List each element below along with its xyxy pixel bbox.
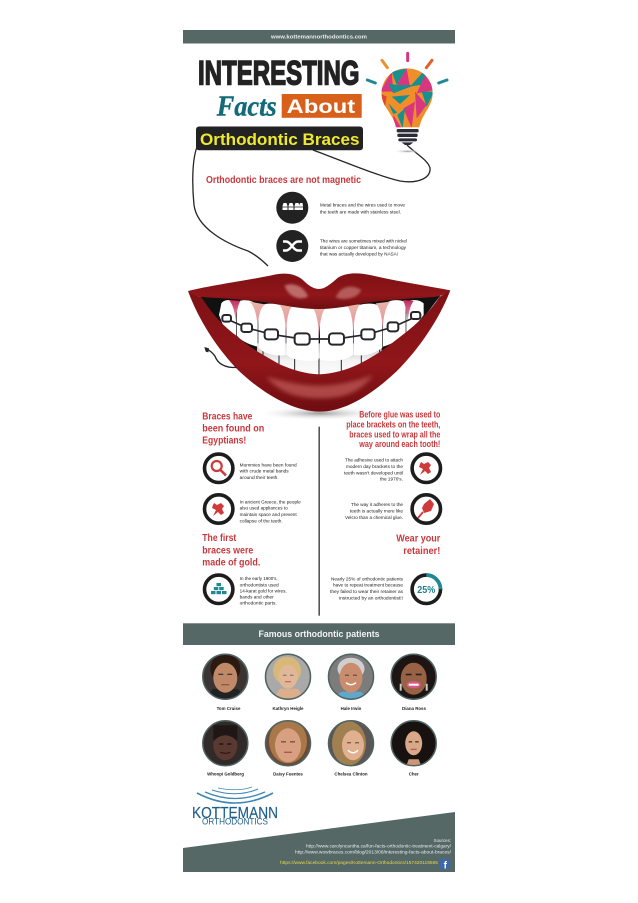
footer panel [183, 812, 455, 872]
text: retainer: have to repeat treatment because [333, 583, 404, 588]
text: gold: orthodontic parts. [240, 600, 277, 606]
text: ancient greece: also used appliances to [240, 506, 288, 511]
names row one: Hale Irwin [341, 706, 362, 711]
title: about: About [287, 96, 356, 118]
footer panel: Sources: [434, 838, 451, 843]
text: nasa: The wires are sometimes mixed with nickel [320, 239, 407, 244]
names row one [217, 706, 427, 711]
heading: before glue [346, 410, 441, 449]
icon: braces on teeth [276, 192, 308, 224]
heading: egyptians: been found on [202, 423, 264, 435]
icon: crossing wires [276, 230, 308, 262]
text: nasa [320, 239, 407, 257]
title: orthodontic braces: Orthodontic Braces [200, 130, 360, 149]
names row one: Diana Ross [402, 706, 427, 711]
heading: first braces: made of gold. [202, 557, 260, 569]
text: gold: bands and other [240, 595, 274, 600]
heading: first braces [202, 532, 260, 569]
text: adhesive: teeth wasn't developed until [344, 470, 403, 475]
text: velcro: Velcro than a chemical glue. [345, 515, 403, 520]
cable from lightbulb to braces title [313, 145, 430, 182]
text: adhesive: The adhesive used to attach [345, 458, 404, 463]
text: retainer: instructed by an orthodontist!! [339, 595, 403, 600]
logo: kottemann orthodontics: ORTHODONTICS [202, 816, 268, 826]
text: mummies [240, 462, 297, 480]
upper teeth [219, 300, 424, 361]
photo: cher [390, 719, 438, 767]
heading: egyptians: Braces have [202, 410, 252, 422]
photo: hale irwin [327, 653, 375, 701]
photo: chelsea clinton [327, 719, 375, 767]
upper lip [188, 273, 450, 309]
divider [318, 427, 320, 616]
icon: glue bottle [412, 495, 440, 523]
footer panel: https://www.facebook.com/pages/Kottemann-Orthodontics/157420119565 [280, 860, 439, 865]
patients bar [183, 623, 455, 645]
text: stainless steel: Metal braces and the wires used to move [320, 203, 406, 208]
icon: facebook: f [444, 860, 448, 872]
infographic [183, 30, 455, 872]
text: gold: In the early 1900's, [240, 576, 278, 581]
heading: egyptians [202, 410, 264, 447]
heading: retainer: retainer! [403, 545, 440, 557]
icon: magnifier [204, 454, 233, 482]
photo: daisy fuentes [264, 719, 312, 767]
plug cable [204, 347, 236, 367]
icon: 25 percent ring [412, 575, 440, 604]
heading: before glue: braces used to wrap all the [349, 429, 440, 439]
lower lip [188, 290, 450, 412]
heading: first braces: The first [202, 532, 237, 544]
photo: whoopi goldberg [201, 719, 249, 767]
photo: diana ross [390, 653, 438, 701]
text: nasa: that was actually developed by NASA! [320, 252, 398, 257]
text: velcro: teeth is actually more like [350, 508, 404, 513]
heading: before glue: way around each tooth! [359, 439, 440, 449]
text: mummies: around their teeth. [240, 475, 279, 480]
icon: pushpin [204, 495, 233, 523]
icon: gold bars [204, 575, 233, 604]
names row two: Cher [409, 771, 419, 776]
text: adhesive: the 1970's. [380, 476, 403, 481]
gums [229, 300, 414, 338]
lips with braces [188, 273, 450, 421]
names row two [207, 771, 419, 776]
heading: first braces: braces were [202, 544, 253, 556]
text: mummies: Mummies have been found [240, 462, 297, 467]
text: adhesive [344, 458, 404, 481]
title: interesting: INTERESTING [198, 54, 360, 92]
text: gold [240, 576, 287, 606]
braces wire and brackets [222, 312, 421, 345]
icon: pushpin right [412, 454, 440, 482]
text: ancient greece: collapse of the teeth. [240, 518, 283, 523]
heading: egyptians: Egyptians! [202, 435, 246, 447]
names row one: Kathryn Heigle [272, 706, 304, 711]
names row two: Whoopi Goldberg [207, 771, 244, 776]
text: gold: 14-karat gold for wires, [240, 589, 287, 594]
text: gold: orthodontists used [240, 582, 279, 587]
logo: kottemann orthodontics: KOTTEMANN [192, 805, 278, 822]
text: stainless steel: the teeth are made with stainless steel. [320, 209, 401, 214]
logo: kottemann orthodontics [192, 787, 278, 826]
heading: retainer: Wear your [396, 533, 440, 545]
lower lip sheen [266, 375, 373, 398]
text: adhesive: modern day brackets to the [346, 464, 404, 469]
header bar: www.kottemannorthodontics.com [270, 34, 367, 40]
text: velcro [345, 502, 404, 520]
text: retainer: Nearly 25% of orthodontic patients [331, 576, 404, 581]
lip highlights [285, 284, 308, 298]
header bar [183, 30, 455, 44]
text: ancient greece [240, 500, 301, 523]
heading: before glue: place brackets on the teeth, [346, 419, 440, 429]
text: stainless steel [320, 203, 406, 214]
title: facts: Facts [216, 90, 277, 122]
names row one: Tom Cruise [217, 706, 241, 711]
icon: 25 percent ring: 25% [417, 585, 435, 596]
lower teeth [257, 343, 382, 378]
heading: not magnetic: Orthodontic braces are not magnetic [206, 175, 361, 186]
text: ancient greece: In ancient Greece, the people [240, 500, 301, 505]
heading: retainer [396, 533, 440, 557]
heading: before glue: Before glue was used to [359, 410, 441, 420]
photo: tom cruise [201, 653, 249, 701]
names row two: Daisy Fuentes [273, 771, 303, 776]
text: mummies: with crude metal bands [240, 469, 289, 474]
icon: facebook [440, 859, 450, 872]
names row two: Chelsea Clinton [334, 771, 368, 776]
text: retainer: they failed to wear their retainer as [330, 589, 404, 594]
footer panel: http://www.carolyncantha.ca/fun-facts-orthodontic-treatment-calgary/ [306, 844, 452, 848]
text: retainer [330, 576, 404, 600]
footer panel: http://www.wowbraces.com/blog/2013/08/interesting-facts-about-braces/ [295, 850, 452, 854]
text: ancient greece: maintain space and prevent [240, 512, 297, 517]
text: velcro: The way it adheres to the [351, 502, 404, 507]
text: nasa: titanium or copper titanium, a technology [320, 245, 407, 250]
icon: lightbulb [367, 53, 447, 153]
photo: kathryn heigl [264, 653, 312, 701]
patients bar: Famous orthodontic patients [258, 629, 380, 640]
title: about [282, 94, 362, 118]
cable from braces title down behind the lips [193, 147, 268, 266]
